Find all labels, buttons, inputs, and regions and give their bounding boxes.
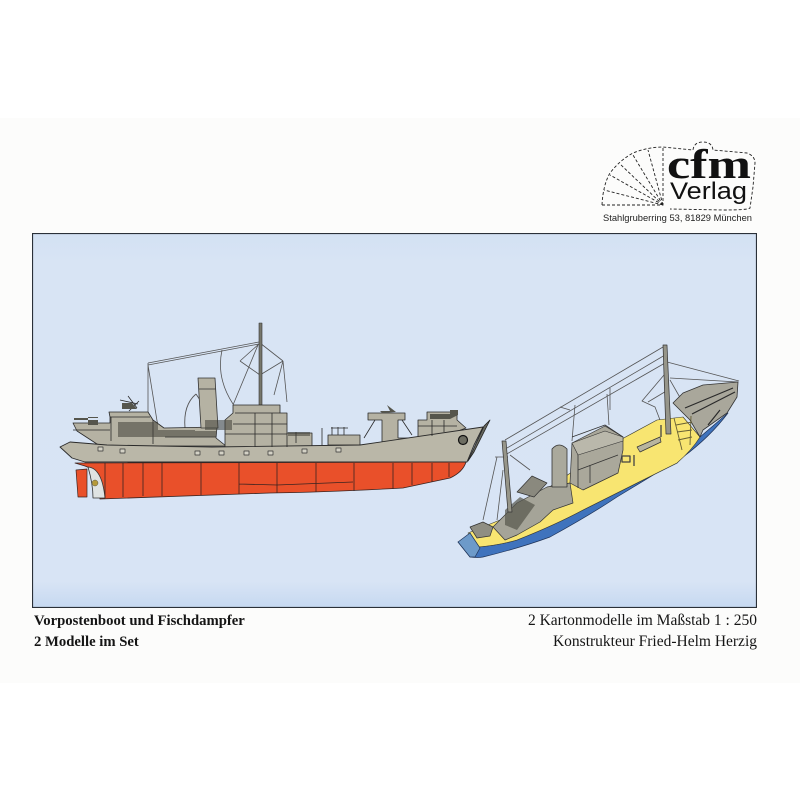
bridge superstructure	[570, 426, 623, 490]
caption subtitle line: 2 Modelle im Set	[34, 634, 139, 650]
mast	[259, 323, 262, 405]
rudder	[76, 469, 87, 497]
scale line: 2 Kartonmodelle im Maßstab 1 : 250	[528, 612, 757, 629]
deck crate	[637, 437, 661, 452]
yellow deck	[468, 417, 700, 547]
masts	[663, 345, 671, 434]
illustration: Vorpostenboot side view	[60, 323, 490, 499]
illustration: Fischdampfer perspective view	[458, 345, 739, 558]
foredeck	[673, 382, 738, 437]
bridge block	[225, 405, 312, 447]
designer line: Konstrukteur Fried-Helm Herzig	[553, 633, 757, 650]
hull plating lines	[105, 463, 449, 498]
icon: dashed fan template	[602, 142, 755, 210]
grey hull	[60, 427, 483, 462]
logo address: Stahlgruberring 53, 81829 München	[603, 213, 752, 224]
caption left	[34, 613, 245, 650]
funnel	[198, 378, 218, 428]
lifeboat	[517, 476, 547, 497]
dark gun and fittings	[74, 403, 458, 425]
deck details	[73, 396, 457, 447]
logo: cfm Verlag	[602, 141, 756, 224]
rigging	[483, 347, 739, 520]
rigging and masts	[148, 342, 287, 428]
bow stem	[468, 420, 490, 461]
red underwater hull	[75, 462, 466, 499]
logo wordmark: cfm: cfm	[667, 141, 751, 187]
caption right	[528, 612, 757, 650]
caption title line: Vorpostenboot und Fischdampfer	[34, 613, 245, 629]
propeller	[88, 467, 105, 498]
panel: ship illustration	[32, 233, 757, 608]
funnel	[552, 445, 567, 487]
blue hull	[458, 413, 728, 558]
aft deck	[493, 483, 573, 540]
forward structures	[328, 412, 466, 446]
ladder	[674, 416, 692, 450]
anchor badge	[458, 436, 468, 444]
superstructure aft	[73, 412, 226, 446]
stern transom	[458, 533, 480, 557]
logo wordmark: Verlag: Verlag	[670, 178, 747, 205]
stern deckhouse	[470, 522, 493, 538]
